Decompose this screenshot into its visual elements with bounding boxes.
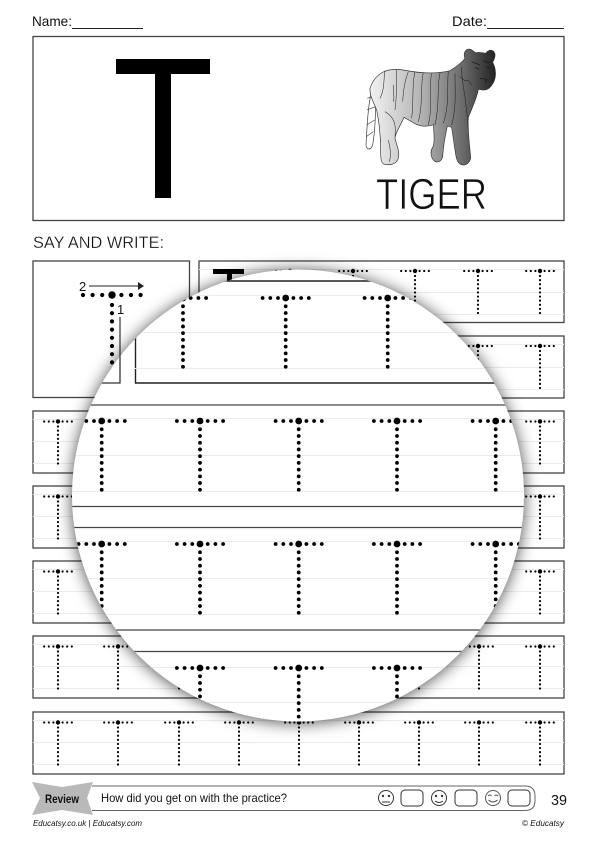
footer left credit: Educatsy.co.uk | Educatsy.com	[33, 819, 142, 828]
review badge: Review	[45, 792, 80, 806]
magnified guide box edge	[102, 355, 121, 384]
name field: Name:	[32, 13, 72, 29]
big letter T	[116, 59, 210, 198]
page number: 39	[551, 792, 567, 809]
magnified row 2	[72, 404, 524, 508]
stroke number 1 and arrow: 1	[117, 302, 124, 317]
tracing row 1	[199, 261, 564, 322]
stroke number 1 and arrow	[103, 302, 124, 383]
magnified row 1	[134, 280, 494, 384]
word: TIGER: TIGER	[376, 170, 487, 219]
tracing row 6	[33, 636, 564, 698]
tracing row 5	[33, 561, 564, 623]
panel: letter and picture	[33, 36, 564, 220]
solid example T	[213, 269, 244, 288]
tracing row 7	[33, 712, 564, 774]
review question: How did you get on with the practice?	[101, 791, 287, 805]
answer box 1	[401, 790, 423, 806]
tracing row 4	[33, 486, 564, 548]
icon: happy face	[486, 790, 500, 806]
review badge	[32, 782, 93, 815]
stroke number 2 and arrow: 2	[79, 279, 86, 294]
panel: stroke order guide	[33, 261, 190, 398]
tracing row 2	[199, 336, 564, 398]
stroke number 2 and arrow	[79, 279, 144, 294]
date field: Date:	[452, 13, 487, 29]
answer box 3	[508, 790, 530, 806]
magnified row 3	[74, 526, 522, 631]
answer box 2	[455, 790, 477, 806]
tracing row 3	[33, 411, 564, 473]
heading: say and write: SAY AND WRITE:	[33, 233, 164, 252]
icon: sad face	[378, 790, 394, 806]
magnified row 4	[134, 650, 462, 718]
name field	[32, 13, 143, 29]
review bar	[32, 782, 535, 815]
magnifier lens	[60, 270, 595, 737]
icon: smiling face	[432, 790, 446, 806]
icon: tiger	[366, 49, 496, 165]
footer right credit: © Educatsy	[522, 819, 565, 828]
date field	[452, 13, 564, 29]
